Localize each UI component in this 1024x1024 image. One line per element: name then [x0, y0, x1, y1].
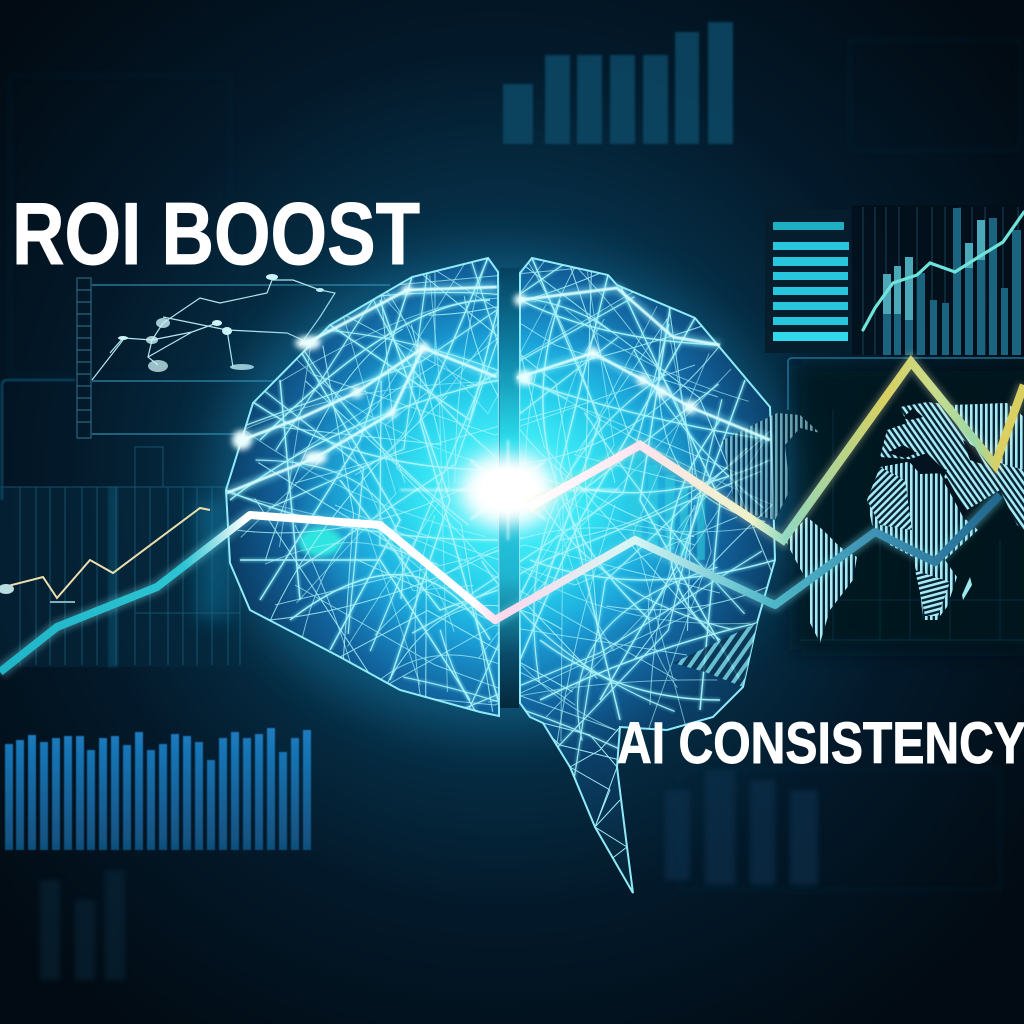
glowing nodes: [232, 285, 697, 465]
brain: [223, 256, 819, 894]
cyan chart bars inside brain: [630, 455, 705, 560]
map: africa south detail: [915, 570, 950, 616]
map: madagascar: [962, 577, 972, 600]
centre split: [500, 268, 519, 708]
brain glow: [215, 255, 785, 725]
bar chart: blurred top: [503, 22, 733, 144]
left chart panel: [0, 447, 250, 667]
line chart: thin left trend: [0, 508, 210, 602]
world map: [785, 358, 1024, 643]
map: eurasia detail: [953, 403, 1024, 470]
core burst: [400, 440, 620, 540]
bar chart: blurred bottom right: [665, 770, 818, 885]
network map panel top left: [2, 274, 390, 500]
bright neural ridges: [227, 287, 770, 493]
bar chart: blurred bottom left: [40, 870, 125, 980]
map: africa: [867, 462, 978, 620]
map: eurasia: [880, 402, 1024, 530]
top right chart panel: [765, 205, 1024, 355]
map: africa diagonal block: [867, 467, 912, 530]
left hemisphere: [226, 258, 499, 716]
bar chart: bottom left blue: [5, 728, 311, 850]
map: seas: [887, 408, 985, 520]
right side dark map backdrop: [795, 365, 1024, 650]
map: south america: [785, 517, 857, 643]
line chart: main trend: [0, 495, 1000, 672]
neural mesh: [226, 258, 775, 892]
title: ROI BOOST: ROI BOOST: [12, 184, 420, 283]
striped wing at brain edge: [723, 413, 820, 520]
map grid: [800, 410, 1024, 640]
right hemisphere and tail: [520, 258, 775, 893]
core glow: [293, 325, 723, 655]
hatch on lower right of brain: [673, 623, 757, 687]
line chart: upper yellow trend: [528, 362, 1024, 540]
